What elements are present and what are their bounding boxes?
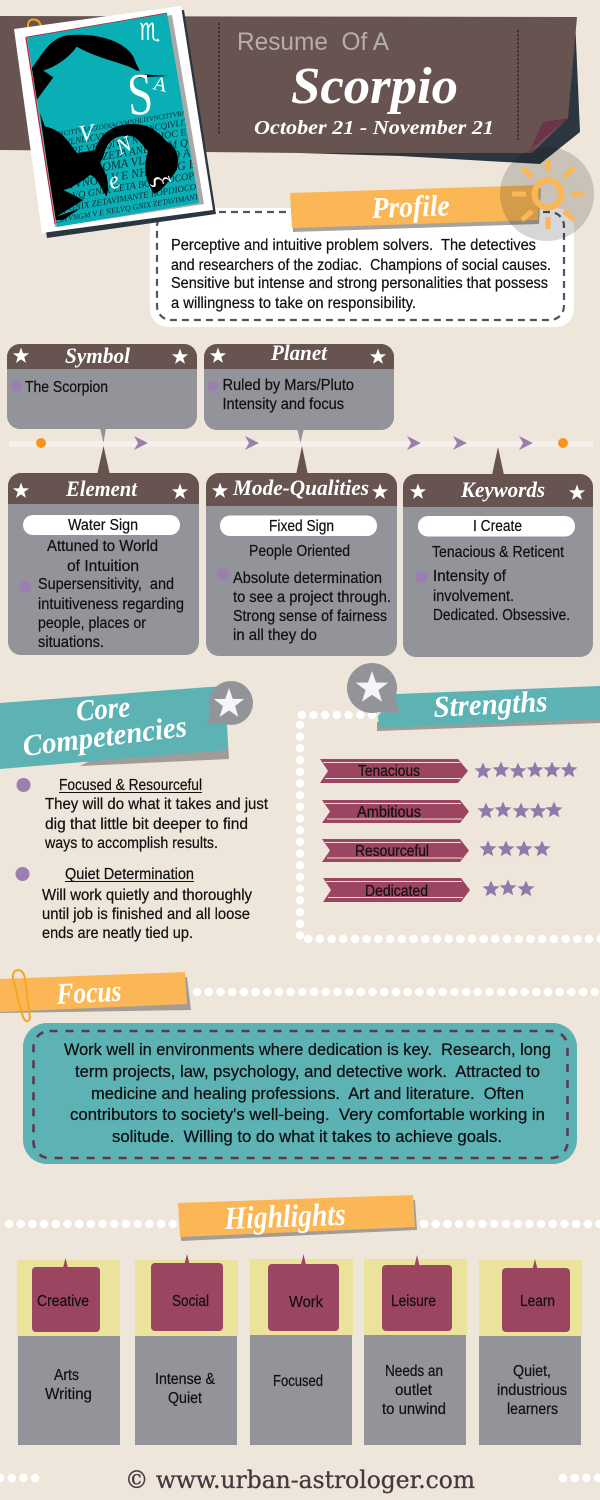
title: Scorpio xyxy=(291,58,458,115)
focus text xyxy=(64,1041,551,1146)
zodiac book cover photo: V xyxy=(77,120,98,148)
strengths banner xyxy=(347,663,600,731)
profile text xyxy=(171,237,551,312)
competency: focused and resourceful: They will do what it takes and just xyxy=(45,796,269,813)
highlight: learn: Learn xyxy=(520,1293,555,1310)
zodiac book cover photo: e xyxy=(104,167,125,195)
mode-qualities heading: Mode-Qualities xyxy=(232,475,369,500)
focus banner: Focus xyxy=(55,975,122,1011)
focus banner xyxy=(0,972,191,1013)
competency: quiet determination: Quiet Determination xyxy=(65,866,194,883)
highlight: leisure: outlet xyxy=(395,1382,433,1399)
mode text: People Oriented xyxy=(249,543,350,560)
focus text: contributors to society's well-being. Very comfortable working in xyxy=(70,1106,545,1124)
competency: focused and resourceful xyxy=(44,777,269,852)
element text: intuitiveness regarding xyxy=(38,596,184,613)
planet text: Ruled by Mars/Pluto xyxy=(222,377,354,394)
strength: ambitious: Ambitious xyxy=(357,804,421,821)
competency: quiet determination xyxy=(42,866,252,942)
zodiac book cover photo: ♏ xyxy=(139,18,161,46)
highlights banner: Highlights xyxy=(223,1196,346,1236)
strengths banner: Strengths xyxy=(433,685,548,724)
competency: quiet determination: Will work quietly and thoroughly xyxy=(42,887,252,904)
planet text xyxy=(222,377,354,413)
zodiac book cover photo: ELTVNGM V E NELVQ GNIX ZETAVIMANTE xyxy=(53,191,204,225)
keywords text: Tenacious & Reticent xyxy=(432,544,565,561)
icon: star bubble xyxy=(347,663,399,713)
symbol text: The Scorpion xyxy=(25,379,108,396)
highlight: creative: Creative xyxy=(37,1293,89,1310)
core competencies banner: Core xyxy=(75,690,131,728)
icon: sun badge xyxy=(500,147,594,241)
highlight: creative xyxy=(17,1258,120,1445)
element text: situations. xyxy=(38,634,104,651)
paper clip: photo xyxy=(28,19,42,36)
zodiac book cover photo: S xyxy=(125,60,155,128)
element text: Attuned to World xyxy=(47,538,158,555)
highlight: learn: Quiet, xyxy=(513,1363,551,1380)
element text: of Intuition xyxy=(67,558,139,575)
highlight: social: Quiet xyxy=(168,1390,203,1407)
header overline: Resume Of A xyxy=(237,28,389,56)
highlight: leisure: Leisure xyxy=(391,1293,436,1310)
focus text: Work well in environments where dedication is key. Research, long xyxy=(64,1041,551,1059)
zodiac book cover photo: EVLNMIT ZETA ANDIIIVM QVO ETVM xyxy=(53,129,235,171)
zodiac book cover photo: VNCITTVRAEZODIACVMNHLITVNCITTVRAEZODIACVMNHLIT xyxy=(54,99,246,139)
competency: quiet determination: ends are neatly tied up. xyxy=(42,925,193,942)
element heading: Element xyxy=(65,476,138,501)
profile text: a willingness to take on responsibility. xyxy=(171,295,416,312)
symbol heading: Symbol xyxy=(65,343,131,368)
highlight: social: Intense & xyxy=(155,1371,216,1388)
core competencies list xyxy=(16,777,269,942)
mode pill xyxy=(220,516,377,536)
highlight: work xyxy=(250,1254,353,1445)
highlight: learn xyxy=(479,1259,582,1445)
zodiac book cover photo xyxy=(14,6,216,238)
panel: element xyxy=(8,446,199,655)
icon: star bubble xyxy=(207,681,253,725)
element pill xyxy=(23,515,180,535)
profile heading banner xyxy=(290,185,541,232)
mode text: to see a project through. xyxy=(233,589,391,606)
date range: October 21 - November 21 xyxy=(254,117,494,139)
core competencies banner: Competencies xyxy=(21,710,189,763)
highlight: learn: learners xyxy=(507,1401,558,1418)
zodiac book cover photo: A xyxy=(151,72,170,97)
strength: ambitious xyxy=(322,800,562,823)
zodiac book cover photo: AVTRE VENQIVM NGIVRIOC ENVM AIQ xyxy=(53,120,228,160)
element text xyxy=(38,538,184,651)
keywords text: involvement. xyxy=(433,588,514,605)
mode pill: Fixed Sign xyxy=(269,518,334,535)
strength: tenacious: Tenacious xyxy=(358,763,420,780)
panel: focus xyxy=(23,1023,577,1164)
keywords pill: I Create xyxy=(473,518,522,535)
panel: keywords xyxy=(403,447,593,657)
keywords heading: Keywords xyxy=(460,477,545,502)
highlight: work: Work xyxy=(289,1294,323,1311)
highlight: social: Social xyxy=(172,1293,209,1310)
highlight: leisure xyxy=(364,1255,467,1445)
footer url: © www.urban-astrologer.com xyxy=(125,1465,475,1494)
focus text: solitude. Willing to do what it takes to achieve goals. xyxy=(112,1128,502,1146)
competency: focused and resourceful: ways to accomplish results. xyxy=(44,835,218,852)
focus text: term projects, law, psychology, and detective work. Attracted to xyxy=(75,1063,540,1081)
profile text: Perceptive and intuitive problem solvers. The detectives xyxy=(171,237,536,254)
planet text: Intensity and focus xyxy=(222,396,344,413)
highlight: work: Focused xyxy=(273,1373,323,1390)
highlight: learn: industrious xyxy=(497,1382,567,1399)
competency: focused and resourceful: dig that little bit deeper to find xyxy=(45,816,248,833)
paper clip: focus xyxy=(13,970,30,1021)
element pill: Water Sign xyxy=(68,517,138,534)
mode text: in all they do xyxy=(233,627,317,644)
zodiac book cover photo: NELVQ GNIX ZETA BOPDIOCOPSRY xyxy=(53,168,213,205)
element text: people, places or xyxy=(38,615,146,632)
planet heading: Planet xyxy=(270,340,328,365)
strength: tenacious xyxy=(320,759,578,783)
keywords pill xyxy=(418,516,575,536)
mode text xyxy=(233,543,391,644)
keywords text xyxy=(432,544,570,624)
highlight: leisure: to unwind xyxy=(382,1401,446,1418)
strength: resourceful xyxy=(322,839,550,862)
panel: mode-qualities xyxy=(206,446,397,656)
timeline xyxy=(9,436,593,450)
strength: dedicated: Dedicated xyxy=(365,883,428,900)
competency: focused and resourceful: Focused & Resourceful xyxy=(59,777,202,794)
panel: planet xyxy=(204,340,394,443)
zodiac book cover photo: ξ xyxy=(146,171,175,190)
highlights banner xyxy=(178,1195,417,1241)
zodiac book cover photo: ELTVNGM V E NHBDRYG ELTVNGM xyxy=(52,149,244,194)
mode text: Absolute determination xyxy=(233,570,382,587)
competency: quiet determination: until job is finished and all loose xyxy=(42,906,250,923)
core competencies banner xyxy=(0,681,253,769)
panel: symbol xyxy=(7,343,197,443)
highlight: creative: Arts xyxy=(54,1367,79,1384)
zodiac book cover photo: VQ GNIX ZETAVIMANTE BOPDIOCOPSRY xyxy=(54,178,218,215)
highlight: creative: Writing xyxy=(45,1386,92,1403)
strength: resourceful: Resourceful xyxy=(355,843,429,860)
keywords text: Dedicated. Obsessive. xyxy=(433,607,570,624)
focus text: medicine and healing professions. Art and literature. Often xyxy=(91,1085,524,1103)
profile text: and researchers of the zodiac. Champions of social causes. xyxy=(171,257,551,274)
profile heading banner: Profile xyxy=(370,189,450,225)
zodiac book cover photo: N xyxy=(111,130,137,160)
keywords text: Intensity of xyxy=(433,568,507,585)
panel: profile box xyxy=(150,208,574,327)
zodiac book cover photo: ETVLNIXCVN ZODIAC ENCQIVLITVRAE ZODI xyxy=(53,109,235,149)
highlight: social xyxy=(135,1254,238,1445)
header banner xyxy=(0,16,580,164)
mode text: Strong sense of fairness xyxy=(233,608,387,625)
profile text: Sensitive but intense and strong personalities that possess xyxy=(171,275,548,292)
element text: Supersensitivity, and xyxy=(38,576,174,593)
highlight: leisure: Needs an xyxy=(385,1363,443,1380)
zodiac book cover photo: QVIENTZOMA VLNCEIQ ANDIIIVM xyxy=(53,138,238,182)
strength: dedicated xyxy=(323,878,534,902)
